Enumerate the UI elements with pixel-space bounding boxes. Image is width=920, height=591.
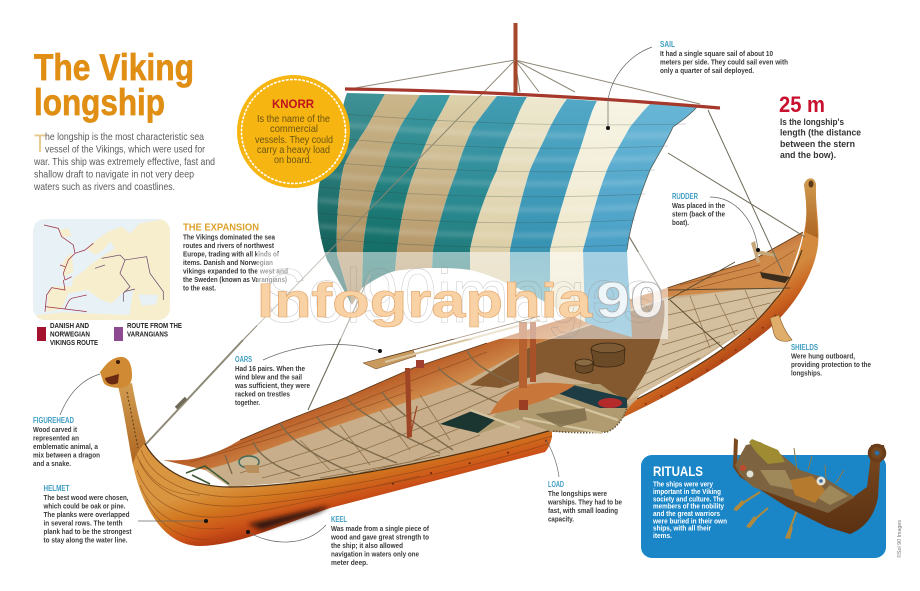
oars label: [234, 345, 382, 407]
intro text block: vessel of the Vikings, which were used for: [45, 144, 205, 156]
near rail: [143, 430, 552, 487]
intro text block: waters such as rivers and coastlines.: [33, 182, 175, 193]
oars label: was sufficient, they were: [234, 381, 310, 390]
stern ropes and braces: [627, 110, 805, 350]
knorr callout: carry a heavy load: [257, 145, 330, 156]
figurehead label: represented an: [33, 434, 79, 442]
bulwark top rail: [240, 232, 803, 440]
panel: rituals: ships, with all their: [653, 524, 711, 533]
stern rivets: [645, 305, 785, 404]
knorr callout: Is the name of the: [257, 114, 330, 125]
shields label: [791, 343, 871, 378]
mast base: [519, 322, 536, 388]
25 m length stat: and the bow).: [780, 150, 836, 161]
the expansion text: routes and rivers of northwest: [183, 241, 274, 250]
25 m length stat: 25 m: [779, 92, 825, 117]
dark hold left: [440, 411, 495, 433]
sail label: It had a single square sail of about 10: [660, 49, 773, 58]
long forestay: [145, 60, 515, 445]
title: [34, 47, 194, 123]
yard: [345, 89, 720, 108]
knorr callout: commercial: [270, 124, 318, 135]
25 m length stat: between the stern: [780, 139, 855, 150]
cutaway hold: [440, 383, 628, 434]
map legend: VARANGIANS: [127, 330, 168, 338]
keel label: wood and gave great strength to: [330, 532, 429, 542]
stern deck planks: [632, 290, 780, 392]
load label: fast, with small loading: [548, 506, 618, 515]
shields label: providing protection to the: [791, 360, 871, 369]
inner deck: [205, 285, 790, 487]
stern rail: [637, 250, 802, 399]
the expansion text: The Vikings dominated the sea: [183, 232, 276, 242]
prow curl: [870, 446, 884, 460]
panel: rituals: members of the nobility: [653, 502, 725, 511]
the expansion text: THE EXPANSION: [183, 222, 259, 234]
oars label: together.: [235, 398, 260, 407]
load label: LOAD: [548, 480, 564, 489]
helmet label: HELMET: [44, 484, 70, 493]
helmet label: [43, 484, 208, 544]
oars label: racked on trestles: [235, 390, 290, 398]
oars label: wind blew and the sail: [234, 372, 302, 382]
dark hold right: [557, 385, 627, 408]
load label: The longships were: [548, 489, 607, 498]
rudder label: [672, 192, 760, 252]
oars label: Had 16 pairs. When the: [235, 364, 305, 373]
panel: rituals: society and culture. The: [653, 494, 724, 503]
helmet label: in several rows. The tenth: [44, 518, 123, 528]
keel label: KEEL: [331, 515, 347, 524]
sail stripes: [317, 93, 385, 305]
rudder label: boat).: [672, 218, 689, 227]
sail seam highlights: [318, 125, 680, 235]
sail label: SAIL: [660, 40, 675, 49]
watermark: 90: [596, 272, 664, 328]
map of viking routes: [33, 218, 170, 322]
red shield: [598, 398, 622, 408]
helmet label: The planks were overlapped: [44, 510, 130, 519]
figurehead label: FIGUREHEAD: [33, 416, 74, 425]
25 m length stat: Is the longship's: [780, 117, 844, 128]
mast foot: [519, 400, 528, 410]
cut edge beading: [553, 404, 628, 433]
intro text block: war. This ship was extremely effective, fast and: [33, 157, 215, 168]
panel: rituals: RITUALS: [653, 463, 703, 479]
mast top and stays: [355, 23, 700, 104]
bulwark plank lines: [190, 250, 795, 462]
keel shadow: [248, 506, 330, 530]
hull plank lines: [135, 436, 552, 540]
sail label: only a quarter of sail deployed.: [660, 66, 754, 75]
keel label: navigation in waters only one: [331, 550, 419, 558]
intro text block: [33, 130, 215, 193]
shields label: SHIELDS: [791, 343, 818, 352]
intro text block: he longship is the most characteristic sea: [45, 132, 204, 143]
the expansion text: to the east.: [183, 284, 216, 292]
stern deck: [628, 286, 787, 400]
stern curl: [808, 180, 814, 188]
intro text block: T: [34, 130, 46, 158]
the expansion text: the Sweden (known as Varangians): [183, 275, 287, 284]
shields label: longships.: [791, 368, 822, 378]
keel label: Was made from a single piece of: [331, 524, 429, 533]
bow cargo and bucket: [186, 456, 259, 484]
knorr callout: vessels. They could: [255, 135, 333, 146]
load label: warships. They had to be: [547, 498, 622, 506]
sail label: [606, 40, 788, 130]
sail: [317, 93, 697, 337]
stern post upper: [804, 178, 818, 238]
the expansion text: items. Danish and Norwegian: [183, 258, 273, 267]
deck ribs: [225, 350, 513, 476]
25 m length stat: [779, 92, 861, 161]
load label: capacity.: [548, 514, 574, 524]
helmet label: plank had to be the strongest: [44, 527, 132, 536]
map legend: [37, 321, 182, 347]
crossing beams: [470, 396, 618, 433]
barrels: [575, 343, 625, 373]
helmet label: which could be oak or pine.: [43, 502, 125, 510]
cargo sacks: [535, 408, 587, 427]
title: The Viking: [34, 47, 194, 88]
the expansion text: vikings expanded to the west and: [183, 266, 288, 276]
panel: rituals: and the great warriors: [653, 509, 720, 518]
hull rivets: [392, 440, 548, 484]
panel: rituals: [641, 438, 886, 558]
figurehead label: [33, 374, 100, 468]
panel: rituals: The ships were very: [653, 480, 714, 488]
image credit: ©Sol 90 Images: [896, 520, 903, 558]
sail label: meters per side. They could sail even with: [660, 58, 788, 66]
map legend: ROUTE FROM THE: [127, 321, 182, 330]
near deck planks: [240, 380, 530, 480]
panel: rituals: items.: [653, 531, 672, 540]
burial ship illustration: [733, 438, 886, 539]
intro text block: shallow draft to navigate in not very deep: [34, 170, 194, 180]
panel: rituals: important in the Viking: [653, 487, 721, 496]
knorr callout: [237, 75, 350, 188]
watermark: Infographia: [257, 275, 592, 328]
figurehead: [100, 357, 146, 465]
hold base: [478, 384, 628, 434]
title: longship: [34, 82, 165, 123]
far bulwark: [163, 232, 803, 470]
oars label: OARS: [235, 355, 252, 364]
keel label: [246, 515, 429, 567]
rudder: [751, 241, 792, 341]
oar rack stay: [308, 275, 370, 410]
the expansion text: [183, 222, 288, 292]
the expansion text: Europe, trading with all kinds of: [183, 250, 279, 258]
25 m length stat: length (the distance: [780, 128, 861, 138]
helmet label: to stay along the water line.: [44, 536, 128, 544]
keel label: the ship; it also allowed: [331, 541, 403, 550]
map legend: DANISH AND: [50, 321, 90, 330]
mast step: [490, 383, 575, 415]
panel: rituals: were buried in their own: [652, 516, 727, 525]
rudder label: RUDDER: [672, 192, 698, 201]
figurehead label: and a snake.: [33, 459, 71, 468]
sail seams: [318, 114, 686, 247]
sail outline: [627, 107, 697, 250]
rudder label: Was placed in the: [672, 201, 725, 210]
brown shaded mid deck: [470, 300, 665, 400]
keel label: meter deep.: [331, 558, 368, 567]
oar rack and trestles: [363, 316, 540, 438]
knorr callout: KNORR: [272, 99, 315, 111]
map legend: NORWEGIAN: [50, 330, 90, 338]
shields label: Were hung outboard,: [791, 352, 855, 360]
watermark: Sol90images: [262, 254, 657, 339]
helmet label: The best wood were chosen,: [44, 493, 128, 502]
near hull: [126, 420, 552, 546]
figurehead label: mix between a dragon: [33, 450, 100, 460]
load label: [546, 440, 622, 524]
knorr callout: on board.: [274, 155, 312, 166]
figurehead label: Wood carved it: [33, 425, 77, 434]
far (stern) hull and deck: [163, 178, 818, 487]
figurehead label: emblematic animal, a: [33, 442, 99, 451]
map legend: VIKINGS ROUTE: [50, 338, 98, 347]
stern hull and post: [622, 178, 818, 418]
rudder label: stern (back of the: [672, 210, 725, 218]
